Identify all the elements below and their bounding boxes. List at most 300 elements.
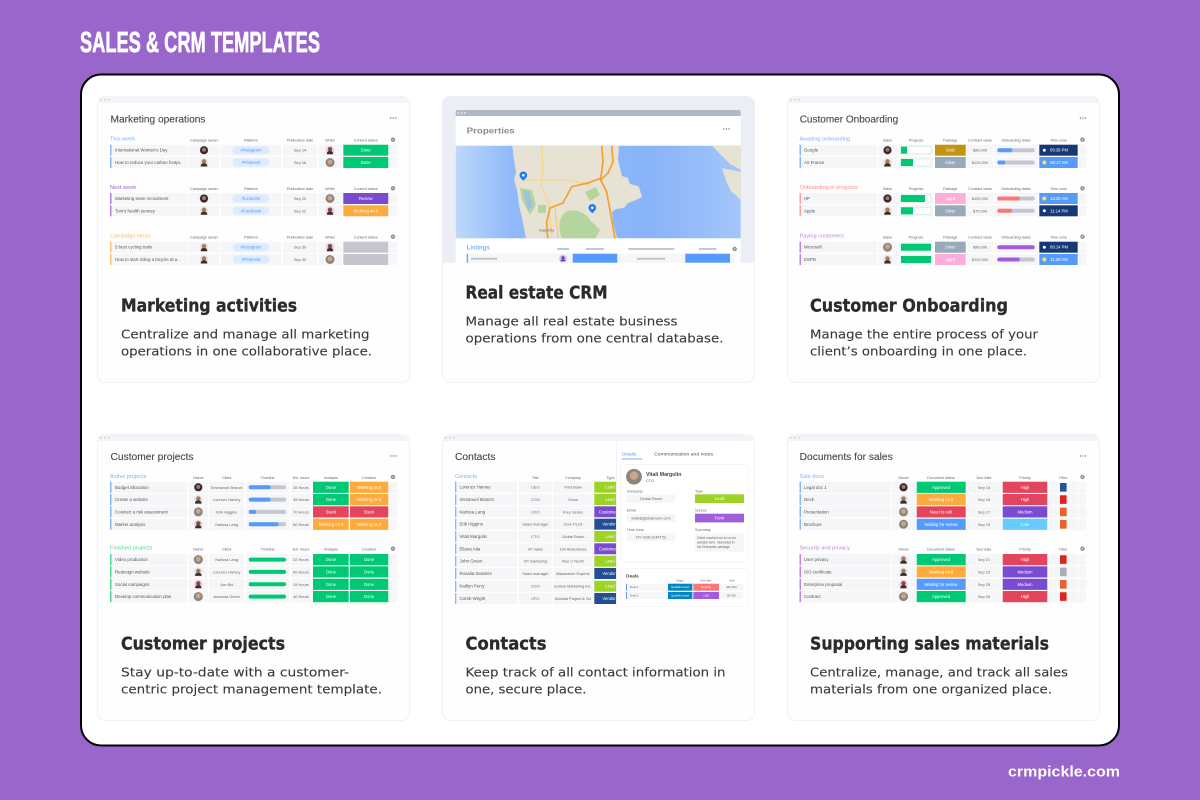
description: contacts bbox=[466, 666, 726, 698]
thumbnail: documents for sales board: Sep 21 bbox=[978, 557, 990, 562]
thumbnail: marketing operations board: Working on it bbox=[354, 208, 379, 213]
thumbnail: customer onboarding board: Sales bbox=[883, 187, 892, 191]
thumbnail: customer onboarding board: Package bbox=[943, 187, 957, 191]
thumbnail: documents for sales board: Sep 14 bbox=[978, 485, 991, 490]
thumbnail: marketing operations board: Marketing operations bbox=[110, 114, 206, 126]
thumbnail: customer onboarding board: 08:17 AM bbox=[1050, 160, 1068, 165]
thumbnail: documents for sales board: Documents for sales bbox=[800, 452, 893, 463]
thumbnail: contacts board bbox=[442, 434, 754, 607]
panel: customer projects bbox=[98, 434, 410, 720]
contact details panel bbox=[616, 441, 754, 607]
thumbnail: documents for sales board: Files bbox=[1059, 548, 1067, 552]
contact details panel: the Enterprise package bbox=[697, 545, 730, 549]
thumbnail: documents for sales board: Need to edit bbox=[930, 509, 953, 514]
description: supporting sales materials: Centralize, manage, and track all sales bbox=[810, 666, 1068, 680]
thumbnail: documents for sales board: Priority bbox=[1019, 476, 1031, 480]
thumbnail: customer onboarding board: Contract value bbox=[968, 236, 992, 240]
contact details panel: Deals bbox=[626, 574, 639, 580]
thumbnail: contacts board: Title bbox=[532, 476, 539, 480]
thumbnail: contacts board: Coreb Wright bbox=[460, 596, 486, 601]
thumbnail: contacts board: Blackstone Experts bbox=[556, 571, 590, 576]
thumbnail: customer onboarding board: 11:14 PM bbox=[1050, 208, 1068, 213]
thumbnail: contacts board: Core PLUs bbox=[563, 522, 583, 527]
contact details panel: Qualified lead bbox=[671, 594, 689, 598]
thumbnail: customer onboarding board: Apple bbox=[804, 208, 816, 213]
thumbnail: customer projects board: Develop communication plan bbox=[115, 594, 172, 599]
thumbnail: customer onboarding board: Sales bbox=[883, 138, 892, 142]
thumbnail: customer projects board: Creation bbox=[362, 548, 376, 552]
thumbnail: customer onboarding board: $100,000 bbox=[972, 196, 989, 201]
thumbnail: customer projects board: Done bbox=[364, 594, 375, 599]
thumbnail: customer projects board: Done bbox=[326, 594, 337, 599]
description: customer projects bbox=[121, 666, 382, 698]
thumbnail: customer projects board: Stuck bbox=[326, 509, 337, 514]
contact details panel: Details bbox=[622, 452, 637, 456]
thumbnail: customer projects board: 60 Hours bbox=[293, 522, 309, 527]
thumbnail: marketing operations board: Platform bbox=[244, 138, 258, 142]
thumbnail: customer onboarding board: 09:14 PM bbox=[1050, 245, 1068, 250]
description: supporting sales materials: materials from one organized place. bbox=[810, 682, 1052, 698]
thumbnail: marketing operations board: Sep 30 bbox=[294, 245, 307, 250]
thumbnail: contacts board: Erik Higgins bbox=[460, 522, 484, 527]
thumbnail: customer projects board bbox=[98, 434, 410, 602]
contact details panel: $10,000 bbox=[726, 585, 737, 589]
contact details panel: Stage bbox=[676, 578, 684, 582]
thumbnail: documents for sales board: Document status bbox=[927, 476, 955, 480]
thumbnail: documents for sales board: Medium bbox=[1018, 569, 1033, 574]
thumbnail: customer projects board: 35 Hours bbox=[293, 485, 309, 490]
thumbnail: contacts board: Customer bbox=[599, 509, 618, 514]
thumbnail: contacts board: Lead bbox=[605, 485, 615, 490]
thumbnail: customer onboarding board: Light bbox=[946, 196, 956, 201]
thumbnail: customer projects board: 22 Hours bbox=[293, 557, 309, 562]
thumbnail: customer projects board: 15 Hours bbox=[293, 582, 309, 587]
thumbnail: documents for sales board: Enterprise proposal bbox=[804, 582, 842, 587]
thumbnail: contacts board: Lead bbox=[605, 497, 615, 502]
thumbnail: marketing operations board: Sep 14 bbox=[294, 148, 307, 153]
thumbnail: customer projects board: Social campaigns bbox=[115, 582, 150, 587]
thumbnail: customer onboarding board: Progress bbox=[909, 236, 924, 240]
thumbnail: contacts board: Rosalia Sanders bbox=[460, 571, 493, 576]
thumbnail: documents for sales board: Medium bbox=[1018, 509, 1033, 514]
thumbnail: customer onboarding board: HP bbox=[804, 196, 810, 201]
thumbnail: documents for sales board: Sep 22 bbox=[978, 569, 990, 574]
thumbnail: customer onboarding board: $100,000 bbox=[972, 257, 989, 262]
thumbnail: marketing operations board: Campaign owner bbox=[190, 138, 219, 142]
description: customer onboarding bbox=[810, 328, 1039, 360]
thumbnail: marketing operations board: Done bbox=[361, 160, 371, 165]
thumbnail: marketing operations board: Publication date bbox=[287, 236, 313, 240]
thumbnail: marketing operations board: Sep 30 bbox=[294, 257, 307, 262]
thumbnail: contacts board: First Bowl bbox=[564, 485, 582, 490]
thumbnail: customer projects board: Lorenzo Harvey bbox=[213, 497, 240, 502]
thumbnail: contacts board: Sales manager bbox=[522, 571, 549, 576]
thumbnail: customer projects board: Working on it bbox=[357, 522, 382, 527]
thumbnail: marketing operations board: Sep 20 bbox=[294, 196, 307, 201]
thumbnail: documents for sales board: Owner bbox=[898, 548, 910, 552]
panel: customer onboarding bbox=[788, 96, 1100, 382]
thumbnail: contacts board: 100 Adventures bbox=[559, 546, 587, 551]
thumbnail: marketing operations board: Content status bbox=[354, 187, 378, 191]
thumbnail: customer projects board: 40 Hours bbox=[293, 594, 309, 599]
thumbnail: customer onboarding board: Paying customers bbox=[800, 234, 844, 240]
icon: map pin bbox=[520, 172, 527, 181]
thumbnail: customer projects board: Client bbox=[222, 476, 231, 480]
heading: real estate crm: Real estate CRM bbox=[466, 283, 608, 304]
contact details panel: website form. Interested in bbox=[697, 540, 735, 544]
contact details panel: Call bbox=[704, 594, 709, 598]
thumbnail: documents for sales board: Priority bbox=[1019, 548, 1031, 552]
contact details panel: Source bbox=[695, 508, 707, 512]
thumbnail: contacts board: Eliana Atia bbox=[460, 546, 481, 551]
thumbnail: customer projects board: Create a website bbox=[115, 497, 149, 502]
thumbnail: customer onboarding board: Air France bbox=[804, 160, 825, 165]
thumbnail: contacts board: VP sales bbox=[528, 546, 543, 551]
thumbnail: customer projects board: Owner bbox=[193, 476, 204, 480]
thumbnail: marketing operations board: Marketing team recruitment bbox=[115, 196, 169, 201]
contact details panel: Deal 2 bbox=[630, 594, 639, 598]
map: Daly City bbox=[539, 228, 554, 232]
thumbnail: documents for sales board: High bbox=[1021, 594, 1030, 599]
thumbnail: customer onboarding board: Contract value bbox=[968, 187, 992, 191]
thumbnail: customer projects board: Stuck bbox=[364, 509, 375, 514]
thumbnail: properties map: Properties bbox=[467, 126, 515, 136]
main panel bbox=[81, 74, 1119, 746]
thumbnail: customer onboarding board: $99,000 bbox=[973, 245, 988, 250]
thumbnail: documents for sales board: Security and privacy bbox=[800, 546, 850, 552]
thumbnail: documents for sales board: High bbox=[1021, 485, 1030, 490]
thumbnail: marketing operations board: #LinkedIn bbox=[242, 196, 261, 201]
thumbnail: customer projects board: Est. hours bbox=[293, 476, 309, 480]
thumbnail: contacts board: Immanuel Branch bbox=[460, 497, 494, 502]
thumbnail: customer projects board: Analysis bbox=[324, 476, 338, 480]
thumbnail: documents for sales board: Presentation bbox=[804, 509, 829, 514]
description: real estate crm: Manage all real estate business bbox=[466, 314, 678, 330]
description: real estate crm bbox=[466, 314, 724, 346]
thumbnail: customer onboarding board: Microsoft bbox=[804, 245, 823, 250]
thumbnail: contacts board: Lead bbox=[605, 559, 615, 564]
thumbnail: contacts board: VP marketing bbox=[524, 559, 547, 564]
thumbnail: documents for sales board: Owner bbox=[898, 476, 910, 480]
thumbnail: documents for sales board: Low bbox=[1021, 522, 1030, 527]
heading: customer projects: Customer projects bbox=[121, 634, 285, 655]
thumbnail: documents for sales board: Approved bbox=[932, 485, 951, 490]
thumbnail: marketing operations board: Campaign owner bbox=[190, 187, 219, 191]
thumbnail: marketing operations board: International Women's Day bbox=[115, 148, 168, 153]
description: customer onboarding: Manage the entire process of your bbox=[810, 328, 1039, 342]
thumbnail: customer onboarding board: Awaiting onboarding bbox=[800, 136, 850, 142]
thumbnail: contacts board: Global Room bbox=[562, 534, 584, 539]
contact details panel: Deal 1 bbox=[630, 585, 639, 589]
thumbnail: customer projects board: Conduct a risk assessment bbox=[115, 509, 168, 514]
thumbnail: customer projects board: Done bbox=[364, 569, 375, 574]
heading: marketing activities: Marketing activities bbox=[121, 296, 297, 317]
contact details panel: Client reached out to us via bbox=[697, 536, 736, 540]
contact details panel: NY USA (GMT-5) bbox=[636, 535, 667, 540]
thumbnail: marketing operations board: Platform bbox=[244, 187, 258, 191]
thumbnail: customer projects board: Timeline bbox=[261, 548, 275, 552]
thumbnail: documents for sales board: Approved bbox=[932, 557, 951, 562]
thumbnail: marketing operations board: Done bbox=[361, 148, 371, 153]
thumbnail: documents for sales board: Sep 17 bbox=[978, 509, 990, 514]
thumbnail: customer onboarding board: Silver bbox=[945, 245, 956, 250]
thumbnail: customer projects board: Client bbox=[222, 548, 231, 552]
thumbnail: contacts board: Company bbox=[565, 476, 581, 480]
thumbnail: customer projects board: Working on it bbox=[319, 522, 344, 527]
heading: supporting sales materials: Supporting sales materials bbox=[810, 634, 1049, 655]
thumbnail: marketing operations board: Writer bbox=[325, 187, 336, 191]
thumbnail: documents for sales board: Document status bbox=[927, 548, 955, 552]
thumbnail: marketing operations board: Campaign owner bbox=[190, 236, 219, 240]
thumbnail: customer onboarding board: Contract value bbox=[968, 138, 992, 142]
heading: customer onboarding: Customer Onboarding bbox=[810, 296, 1008, 317]
thumbnail: customer onboarding board: Progress bbox=[909, 138, 924, 142]
thumbnail: customer projects board: Done bbox=[364, 582, 375, 587]
thumbnail: marketing operations board: Content status bbox=[354, 138, 378, 142]
thumbnail: contacts board: CFO bbox=[531, 596, 539, 601]
thumbnail: documents for sales board: Sep 26 bbox=[978, 594, 990, 599]
thumbnail: marketing operations board: #Pinterest bbox=[242, 160, 261, 165]
thumbnail: customer projects board: Market analysis bbox=[115, 522, 146, 527]
thumbnail: marketing operations board: #Instagram bbox=[241, 245, 262, 250]
thumbnail: documents for sales board bbox=[788, 434, 1100, 602]
thumbnail: documents for sales board: High bbox=[1021, 557, 1030, 562]
description: marketing activities: operations in one collaborative place. bbox=[121, 344, 372, 360]
thumbnail: documents for sales board: Sep 16 bbox=[978, 497, 990, 502]
thumbnail: customer projects board: Karissa Lang bbox=[215, 557, 238, 562]
thumbnail: customer projects board: Budget allocation bbox=[115, 485, 149, 490]
description: customer onboarding: client’s onboarding in one place. bbox=[810, 344, 1027, 360]
thumbnail: marketing operations board: 5 best cycling trails bbox=[115, 245, 153, 250]
thumbnail: contacts board: Vendor bbox=[602, 596, 616, 601]
thumbnail: customer projects board: Done bbox=[326, 485, 337, 490]
thumbnail: customer onboarding board: Customer Onboarding bbox=[800, 114, 898, 126]
thumbnail: documents for sales board: Files bbox=[1059, 476, 1067, 480]
map bbox=[456, 146, 741, 238]
contact details panel: Type bbox=[695, 490, 703, 494]
thumbnail: documents for sales board: High bbox=[1021, 497, 1030, 502]
thumbnail: contacts board: Four Series bbox=[563, 509, 583, 514]
thumbnail: customer projects board: Done bbox=[326, 569, 337, 574]
description: contacts: Keep track of all contact information in bbox=[466, 666, 726, 680]
thumbnail: customer onboarding board: Progress bbox=[909, 187, 924, 191]
thumbnail: customer projects board: Creation bbox=[362, 476, 376, 480]
thumbnail: marketing operations board: #Facebook bbox=[241, 208, 262, 213]
thumbnail: marketing operations board: Campaign ideas bbox=[110, 234, 151, 240]
panel: real estate crm bbox=[442, 96, 754, 382]
thumbnail: customer onboarding board: Sales bbox=[883, 236, 892, 240]
thumbnail: documents for sales board: Sep 25 bbox=[978, 582, 990, 587]
contact details panel: Summary bbox=[695, 528, 711, 532]
thumbnail: contacts board: Contacts bbox=[455, 474, 477, 480]
thumbnail: contacts board: COO bbox=[531, 497, 540, 502]
thumbnail: marketing operations board: #Pinterest bbox=[242, 257, 261, 262]
contact details panel: Email bbox=[627, 508, 636, 512]
thumbnail: marketing operations board: Sep 16 bbox=[294, 160, 306, 165]
thumbnail: marketing operations board: Writer bbox=[325, 138, 336, 142]
thumbnail: marketing operations board: Next week bbox=[110, 185, 136, 191]
thumbnail: customer onboarding board: Onboarding dates bbox=[1001, 138, 1031, 142]
thumbnail: contacts board: Lead bbox=[605, 534, 615, 539]
thumbnail: customer projects board: Done bbox=[326, 582, 337, 587]
thumbnail: documents for sales board: Waiting for review bbox=[924, 522, 959, 527]
contact details panel: Vitali Margolin bbox=[646, 472, 681, 478]
thumbnail: marketing operations board: How to reduce your carbon footpr.. bbox=[115, 160, 182, 165]
thumbnail: documents for sales board: Contract bbox=[804, 594, 821, 599]
thumbnail: customer projects board: Active projects bbox=[110, 474, 147, 480]
thumbnail: customer projects board: 70 Hours bbox=[293, 509, 309, 514]
description: marketing activities: Centralize and manage all marketing bbox=[121, 328, 370, 342]
thumbnail: customer onboarding board: Time zone bbox=[1050, 187, 1067, 191]
thumbnail: customer onboarding board: Time zone bbox=[1050, 236, 1067, 240]
thumbnail: documents for sales board: Sale docs bbox=[800, 474, 824, 480]
contact details panel: Form bbox=[715, 516, 725, 520]
contact details panel: Due date bbox=[700, 578, 712, 582]
thumbnail: customer projects board: Video production bbox=[115, 557, 148, 562]
thumbnail: documents for sales board: ISO certificate bbox=[804, 569, 832, 574]
thumbnail: customer onboarding board: 11:30 AM bbox=[1050, 257, 1068, 262]
thumbnail: contacts board: COO bbox=[531, 584, 540, 589]
thumbnail: documents for sales board: Waiting for review bbox=[924, 582, 959, 587]
thumbnail: customer projects board: 60 Hours bbox=[293, 569, 309, 574]
thumbnail: documents for sales board: Deck bbox=[804, 497, 815, 502]
thumbnail: contacts board: Type bbox=[606, 476, 614, 480]
thumbnail: customer projects board: Done bbox=[326, 497, 337, 502]
thumbnail: documents for sales board: Approved bbox=[932, 594, 951, 599]
contact details panel: Meeting bbox=[701, 585, 712, 589]
title: SALES & CRM TEMPLATES bbox=[80, 27, 320, 59]
panel: supporting sales materials bbox=[788, 434, 1100, 720]
thumbnail: documents for sales board: Due date bbox=[977, 476, 991, 480]
description: customer projects: Stay up-to-date with a customer- bbox=[121, 666, 349, 680]
thumbnail: marketing operations board: Publication date bbox=[287, 138, 313, 142]
thumbnail: customer projects board: Working on it bbox=[357, 485, 382, 490]
thumbnail: customer projects board: Joe Bid bbox=[220, 582, 233, 587]
thumbnail: customer projects board: Analysis bbox=[324, 548, 338, 552]
thumbnail: documents for sales board: Due date bbox=[977, 548, 991, 552]
thumbnail: customer onboarding board: $75,000 bbox=[973, 208, 988, 213]
contact details panel: Communication and notes bbox=[654, 452, 714, 456]
thumbnail: documents for sales board: Working on it bbox=[929, 497, 954, 502]
thumbnail: contacts board: Sales manager bbox=[522, 522, 549, 527]
description: supporting sales materials bbox=[810, 666, 1068, 698]
thumbnail: documents for sales board: Brochure bbox=[804, 522, 822, 527]
thumbnail: documents for sales board: Working on it bbox=[929, 569, 954, 574]
contact details panel: $5,400 bbox=[727, 594, 736, 598]
thumbnail: contacts board: Vendor bbox=[602, 571, 616, 576]
thumbnail: contacts board: Karissa Lang bbox=[460, 509, 486, 514]
thumbnail: marketing operations board: #Instagram bbox=[241, 148, 262, 153]
thumbnail: customer onboarding board: $120,000 bbox=[972, 160, 989, 165]
thumbnail: marketing operations board: Publication date bbox=[287, 187, 313, 191]
thumbnail: customer projects board: Working on it bbox=[357, 497, 382, 502]
description: real estate crm: operations from one central database. bbox=[466, 332, 724, 346]
thumbnail: customer projects board: Lorenzo Harvey bbox=[213, 569, 240, 574]
contact details panel: Size bbox=[729, 578, 735, 582]
thumbnail: customer onboarding board: Google bbox=[804, 148, 819, 153]
thumbnail: customer onboarding board: ESPN bbox=[804, 257, 816, 262]
contact details panel: Time zone bbox=[627, 528, 644, 532]
thumbnail: contacts board: CTO bbox=[531, 534, 539, 539]
thumbnail: customer onboarding board: 09:39 PM bbox=[1050, 148, 1068, 153]
panel: contacts bbox=[442, 434, 754, 720]
contact details panel: Global Room bbox=[640, 496, 662, 501]
thumbnail: customer onboarding board: Light bbox=[946, 257, 956, 262]
thumbnail: contacts board: Lead bbox=[605, 584, 615, 589]
thumbnail: marketing operations board: How to start riding a bicycle at a.. bbox=[115, 257, 180, 262]
thumbnail: customer onboarding board: Time zone bbox=[1050, 138, 1067, 142]
thumbnail: customer projects board: Owner bbox=[193, 548, 204, 552]
thumbnail: customer onboarding board: Silver bbox=[945, 208, 956, 213]
thumbnail: contacts board: CFO bbox=[531, 509, 539, 514]
thumbnail: customer projects board: Amanda Green bbox=[214, 594, 240, 599]
thumbnail: customer onboarding board: Package bbox=[943, 236, 957, 240]
thumbnail: properties map bbox=[442, 96, 754, 263]
description: contacts: one, secure place. bbox=[466, 682, 586, 698]
thumbnail: documents for sales board: Sep 19 bbox=[978, 522, 990, 527]
contact details panel: Qualified lead bbox=[671, 585, 689, 589]
thumbnail: documents for sales board: Medium bbox=[1018, 582, 1033, 587]
thumbnail: contacts board: Customer bbox=[599, 546, 618, 551]
thumbnail: customer onboarding board: Silver bbox=[945, 160, 956, 165]
thumbnail: customer onboarding board: Gold bbox=[946, 148, 955, 153]
contact details panel: vitali@globalroom.com bbox=[631, 515, 671, 520]
thumbnail: contacts board: Admiral Project & Go bbox=[555, 596, 591, 601]
thumbnail: customer projects board: Finished projects bbox=[110, 546, 152, 552]
thumbnail: customer onboarding board: Package bbox=[943, 138, 957, 142]
thumbnail: documents for sales board: Legal doc 1 bbox=[804, 485, 827, 490]
thumbnail: contacts board: Contacts bbox=[455, 452, 496, 463]
thumbnail: customer projects board: Customer projects bbox=[110, 452, 194, 463]
thumbnail: properties map: Listings bbox=[467, 246, 490, 252]
thumbnail: contacts board: Vitali Margolin bbox=[460, 534, 488, 539]
thumbnail: contacts board: CEO bbox=[531, 485, 540, 490]
thumbnail: marketing operations board: Writer bbox=[325, 236, 336, 240]
heading: contacts: Contacts bbox=[466, 634, 546, 655]
thumbnail: customer projects board: Redesign website bbox=[115, 569, 150, 574]
thumbnail: contacts board: Evolve Marketing Inc. bbox=[554, 584, 592, 589]
panel: marketing activities bbox=[98, 96, 410, 382]
thumbnail: customer onboarding board bbox=[788, 96, 1100, 265]
description: customer projects: centric project management template. bbox=[121, 682, 382, 698]
thumbnail: customer projects board: Emmanuel Branch bbox=[211, 485, 243, 490]
thumbnail: marketing operations board: Review bbox=[359, 196, 374, 201]
thumbnail: customer onboarding board: Onboarding dates bbox=[1001, 236, 1031, 240]
thumbnail: contacts board: Snow bbox=[568, 497, 578, 502]
thumbnail: customer projects board: 45 Hours bbox=[293, 497, 309, 502]
thumbnail: customer onboarding board: Onboarding dates bbox=[1001, 187, 1031, 191]
thumbnail: customer projects board: Karissa Lang bbox=[215, 522, 238, 527]
footer: site name: crmpickle.com bbox=[1008, 764, 1120, 780]
thumbnail: marketing operations board: Sep 22 bbox=[294, 208, 306, 213]
thumbnail: marketing operations board bbox=[98, 96, 410, 265]
thumbnail: contacts board: John Green bbox=[460, 559, 483, 564]
thumbnail: customer projects board: Timeline bbox=[261, 476, 275, 480]
thumbnail: marketing operations board: Tom's health journey bbox=[115, 208, 156, 213]
description: marketing activities bbox=[121, 328, 372, 360]
thumbnail: customer projects board: Done bbox=[364, 557, 375, 562]
thumbnail: contacts board: Run C North bbox=[562, 559, 584, 564]
icon: map pin bbox=[588, 204, 596, 213]
thumbnail: contacts board: Lorenzo Harvey bbox=[460, 485, 491, 490]
thumbnail: customer projects board: Est. hours bbox=[293, 548, 309, 552]
contact details panel: Company bbox=[627, 490, 643, 494]
thumbnail: customer projects board: Done bbox=[326, 557, 337, 562]
thumbnail: contacts board: Vendor bbox=[602, 522, 616, 527]
thumbnail: customer onboarding board: Onboarding in progress bbox=[800, 185, 858, 191]
thumbnail: marketing operations board: This week bbox=[110, 136, 135, 142]
thumbnail: customer projects board: Erik Higgins bbox=[216, 509, 237, 514]
